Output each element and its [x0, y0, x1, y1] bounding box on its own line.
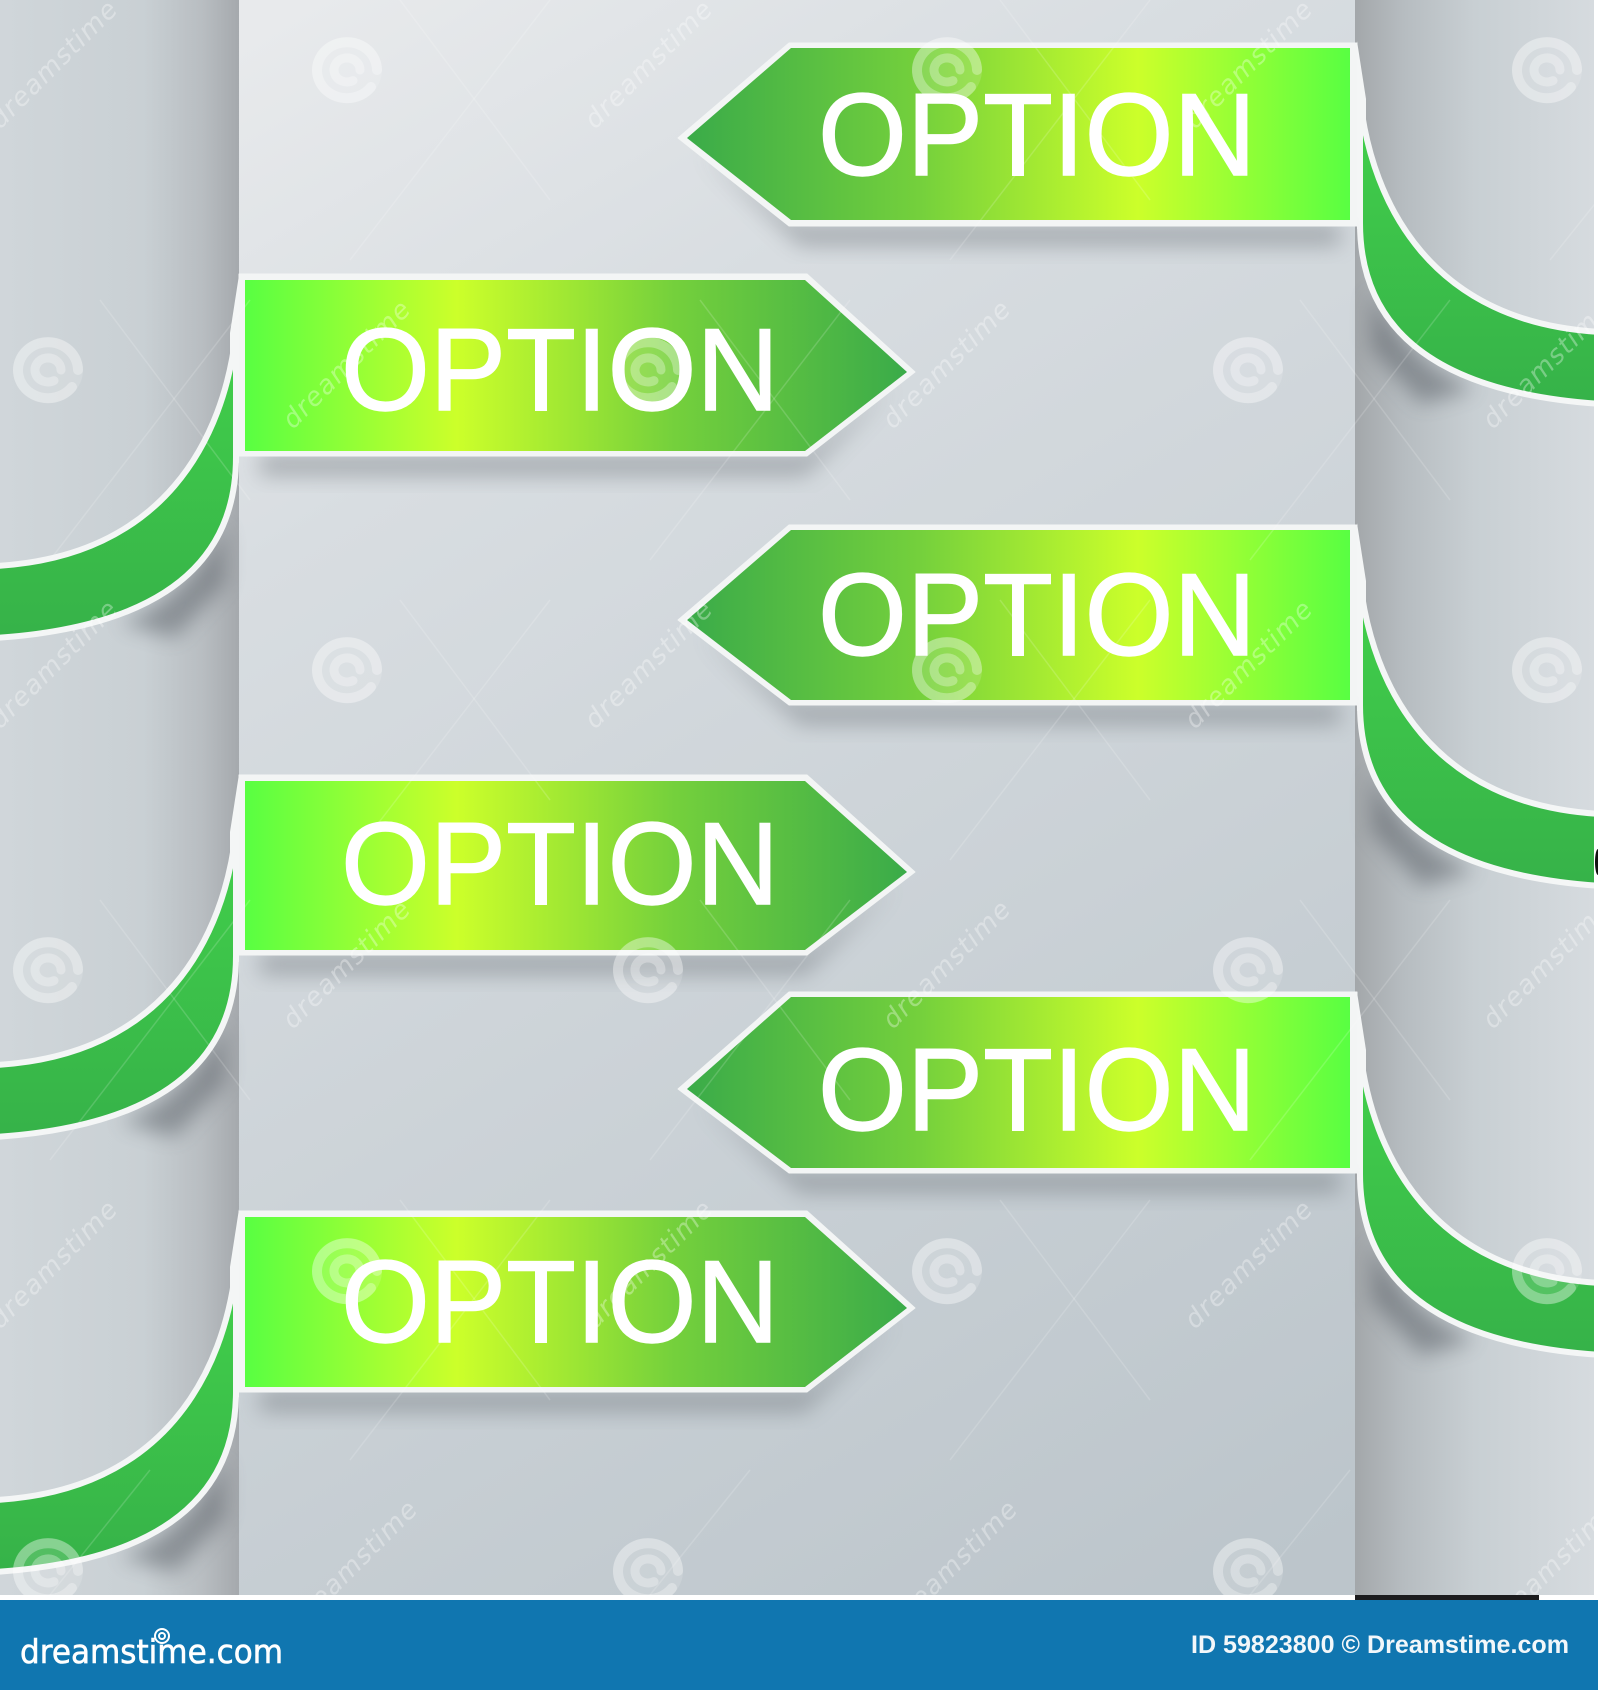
panel: right column	[1355, 0, 1594, 1595]
banner 2: right-pointing arrow: OPTION	[341, 304, 779, 435]
watermark: dreamstime text: dreamstime	[277, 895, 417, 1035]
ribbon tail: banner 1	[1357, 41, 1598, 404]
right page edge	[1594, 0, 1598, 1600]
ribbon tail: banner 3	[1357, 523, 1598, 886]
watermark: dreamstime text: dreamstime	[579, 595, 719, 735]
watermark: dreamstime text: dreamstime	[579, 1195, 719, 1335]
dark edge spot	[1595, 849, 1598, 875]
banner 3: left-pointing arrow: OPTION	[818, 549, 1256, 680]
watermark: dreamstime text: dreamstime	[877, 895, 1017, 1035]
watermark: dreamstime text: dreamstime	[884, 1495, 1024, 1635]
ribbon tail: banner 4	[0, 774, 239, 1137]
dark artifact strip above footer	[1355, 1595, 1539, 1600]
banner 6: right-pointing arrow: OPTION	[341, 1236, 779, 1367]
footer logo text: dreamstime.com	[20, 1632, 283, 1671]
banner 1: left-pointing arrow	[678, 43, 1357, 245]
banner 5: left-pointing arrow: OPTION	[818, 1024, 1256, 1155]
watermark: dreamstime text: dreamstime	[284, 1495, 424, 1635]
footer logo spiral	[155, 1629, 169, 1643]
footer credit: ID 59823800 © Dreamstime.com	[1191, 1631, 1569, 1659]
ribbon tail: banner 2	[0, 275, 239, 638]
ribbon tail: banner 6	[0, 1209, 239, 1572]
banner 1: left-pointing arrow: OPTION	[818, 69, 1256, 200]
banner 6: right-pointing arrow	[239, 1211, 915, 1411]
watermark: dreamstime text: dreamstime	[1179, 1195, 1319, 1335]
panel: left column	[0, 0, 239, 1595]
banner 2: right-pointing arrow	[239, 274, 915, 475]
watermark: dreamstime text: dreamstime	[1179, 595, 1319, 735]
watermark: dreamstime text: dreamstime	[877, 295, 1017, 435]
banner 4: right-pointing arrow: OPTION	[341, 798, 779, 929]
panel: centre column	[239, 0, 1357, 1595]
banner 5: left-pointing arrow	[678, 992, 1357, 1192]
banner 3: left-pointing arrow	[678, 525, 1357, 724]
ribbon tail: banner 5	[1357, 992, 1598, 1355]
footer bar	[0, 1600, 1598, 1690]
watermark: dreamstime text: dreamstime	[277, 295, 417, 435]
watermark: diagonal lines	[78, 48, 1450, 1594]
banner 4: right-pointing arrow	[239, 775, 915, 974]
